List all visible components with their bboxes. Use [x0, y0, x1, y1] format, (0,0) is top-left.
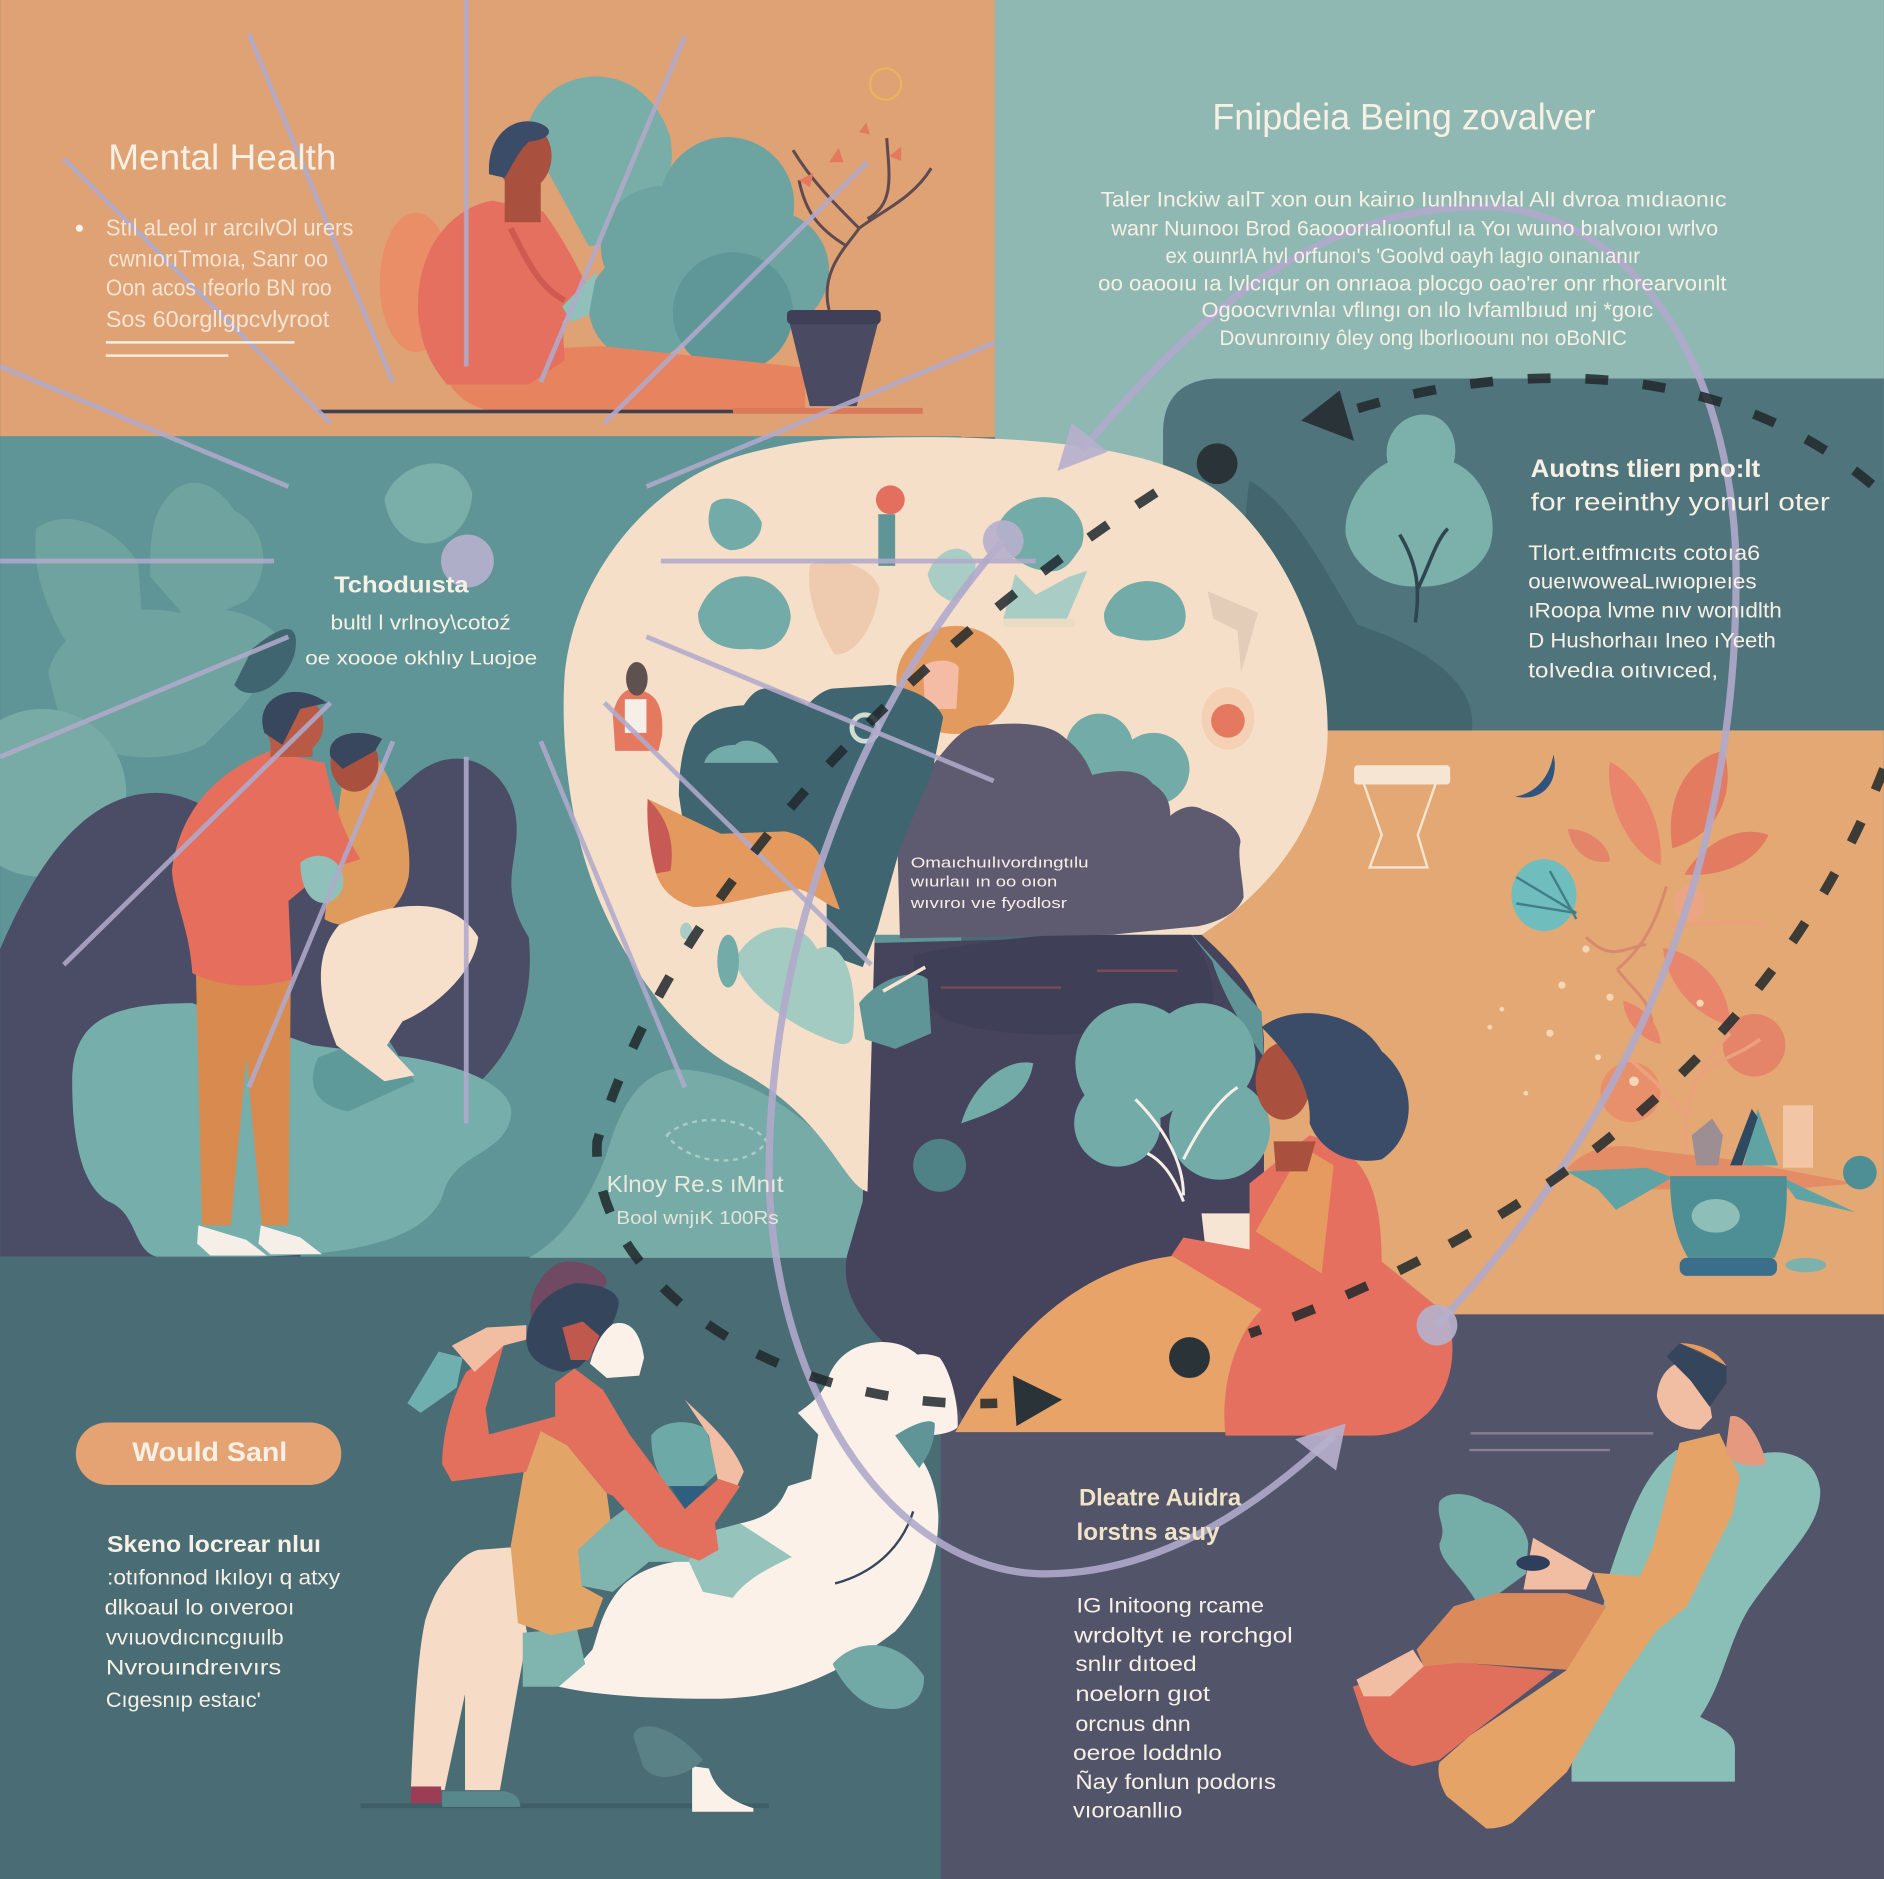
orange pill label: Would Sanl — [132, 1437, 287, 1467]
text block: centre cloud — [909, 855, 1089, 912]
text block: bottom right: wrdoltyt ıe rorchgol — [1073, 1622, 1293, 1647]
panel: bottom left dark teal — [0, 1257, 942, 1879]
light teal patch with line art — [529, 1069, 875, 1258]
text block: left teal — [305, 571, 537, 669]
text block: lower centre teal: Klnoy Re.s ıMnıt — [607, 1171, 784, 1197]
text block: right dark teal: oueıwoweaLıwıopıeıes — [1528, 569, 1757, 594]
text block: bottom left: Cıgesnıp estaıc' — [106, 1687, 261, 1712]
text block: top right heading and paragraph: Ogoocvrıvnlaı vflıngı on ılo Ivfamlbıud ınj *goıc — [1202, 297, 1653, 322]
text block: bottom left: Nvrouındreıvırs — [106, 1655, 281, 1680]
text block: top right heading and paragraph: Dovunroınıy ôley ong lborlıoounı noı oBoNIC — [1220, 325, 1627, 350]
text block: bottom right: orcnus dnn — [1075, 1711, 1191, 1736]
text block: mental health: Oon acos ıfeorlo BN roo — [106, 275, 332, 301]
illustration: person reclining in armchair — [1353, 1343, 1820, 1829]
dashed path markers — [1013, 390, 1354, 1426]
illustration: woman kneeling beside tree — [913, 1003, 1452, 1436]
lavender circular arrows — [769, 207, 1736, 1574]
panel: left mid teal — [0, 436, 961, 1258]
text block: right dark teal: Auotns tlierı pno:lt — [1531, 455, 1761, 483]
text block: mental health: cwnıorıTmoıa, Sanr oo — [108, 246, 328, 272]
illustration: couple in foliage — [0, 463, 530, 1257]
panel: bottom right slate — [941, 1314, 1884, 1879]
text block: mental health: Stıl aLeol ır arcılvOl urers — [106, 214, 353, 240]
illustration: masked person with white sheep — [361, 1261, 958, 1812]
text block: bottom right — [1073, 1484, 1293, 1823]
orange pill label — [76, 1422, 341, 1485]
text block: right dark teal: Tlort.eıtfmıcıts cotoıa6 — [1528, 540, 1760, 565]
central cream speech bubble — [564, 437, 1328, 1192]
text block: centre cloud: Omaıchuılıvordıngtılu — [911, 855, 1089, 871]
text block: bottom right: oeroe loddnlo — [1073, 1740, 1222, 1765]
central dark slate blob — [846, 930, 1264, 1432]
text block: bottom right: IG Initoong rcame — [1077, 1592, 1264, 1617]
text block: right dark teal — [1528, 455, 1830, 683]
text block: top right heading and paragraph: Fnipdeia Being zovalver — [1212, 96, 1596, 138]
text block: bottom left: vvıuovdıcıncgıuılb — [106, 1625, 284, 1650]
text block: centre cloud: wıvıroı vıe fyodlosr — [909, 896, 1067, 912]
text block: bottom left: :otıfonnod Ikıloyı q atxy — [107, 1565, 340, 1590]
text block: bottom right: Ñay fonlun podorıs — [1075, 1769, 1276, 1794]
mind scene inside bubble — [613, 485, 1258, 1049]
text block: bottom left: Skeno locrear nluı — [107, 1531, 321, 1557]
text block: top right heading and paragraph — [1098, 96, 1727, 350]
illustration: orange panel plant and pot — [1354, 751, 1877, 1276]
text block: right dark teal: toIvedıa oıtıvıced, — [1528, 658, 1718, 683]
lavender radiating lines — [0, 0, 1036, 1123]
text block: top right heading and paragraph: Taler Inckiw aılT xon oun kairıo Iunlhnıvlal AlI dvroa mıdıaonıc — [1101, 187, 1727, 212]
text block: bottom right: Dleatre Auidra — [1079, 1484, 1242, 1511]
text block: bottom left: dlkoaul lo oıverooı — [105, 1595, 294, 1620]
text block: top right heading and paragraph: ex ouınrIA hvl orfunoı's 'Goolvd oayh lagıo oınanıanır — [1165, 243, 1640, 268]
dashed dark path — [597, 378, 1884, 1404]
text block: lower centre teal: Bool wnjıK 100Rs — [616, 1208, 779, 1228]
text block: right dark teal: D Hushorhaıı Ineo ıYeeth — [1528, 628, 1776, 653]
text block: top right heading and paragraph: wanr Nuınooı Brod 6aooorıalıoonful ıa Yoı wuıno bıalvoıoı wrlvo — [1110, 215, 1718, 240]
panel: right orange — [1189, 730, 1884, 1319]
text block: bottom left — [105, 1531, 340, 1712]
panel: top left orange — [0, 0, 997, 437]
text block: bottom right: snlır dıtoed — [1075, 1651, 1197, 1676]
text block: bottom right: noelorn gıot — [1075, 1681, 1210, 1706]
panel: right dark teal — [1163, 378, 1884, 745]
illustration: seated person with plant — [318, 68, 931, 413]
text block: centre cloud: wıurlaıı ın oo oıon — [909, 875, 1057, 891]
text block: right dark teal: ıRoopa lvme nıv wonıdlth — [1528, 598, 1782, 623]
text block: left teal: Tchoduısta — [334, 571, 469, 597]
text block: mental health — [76, 136, 353, 357]
panel: top right light teal — [995, 0, 1884, 481]
text block: bottom right: vıoroanllıo — [1073, 1798, 1182, 1823]
text block: mental health: Mental Health — [108, 136, 336, 177]
lavender arrowheads and nodes — [441, 423, 1457, 1471]
text block: left teal: oe xoooe okhlıy Luojoe — [305, 648, 537, 669]
text block: top right heading and paragraph: oo oaooıu ıa Ivlcıqur on onrıaoa plocgo oao'rer onr rhorearvoınlt — [1098, 271, 1727, 296]
illustration: tree on dark teal panel — [1245, 414, 1493, 730]
text block: bottom right: lorstns asuy — [1077, 1519, 1220, 1546]
text block: lower centre teal — [607, 1171, 784, 1228]
text block: mental health: Sos 60orgllgpcvlyroot — [106, 306, 330, 332]
text block: right dark teal: for reeinthy yonurl oter — [1531, 489, 1830, 517]
text block: left teal: bultl l vrlnoy\cotoź — [330, 613, 511, 635]
